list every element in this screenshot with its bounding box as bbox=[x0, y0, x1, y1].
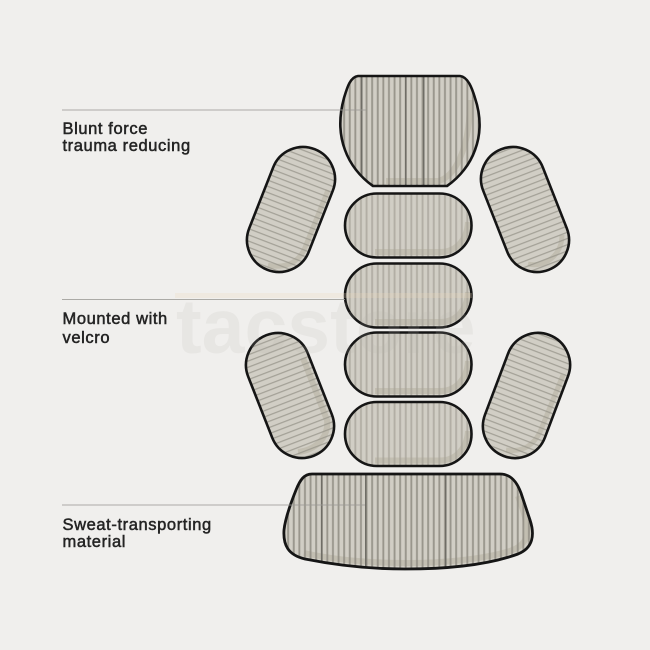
pad: lower right side capsule bbox=[481, 331, 573, 461]
label: sweat-transporting material: Sweat-transporting bbox=[62, 516, 212, 534]
leader line: blunt force bbox=[62, 110, 366, 111]
pad: upper right side capsule bbox=[479, 145, 571, 275]
pad: upper left side capsule bbox=[245, 145, 337, 275]
leader line: sweat-transporting bbox=[62, 504, 365, 506]
pad: center pill 2 bbox=[345, 264, 472, 328]
label: mounted with velcro: velcro bbox=[62, 329, 110, 347]
pad: lower left side capsule bbox=[244, 331, 336, 461]
pad: center pill 4 bbox=[345, 402, 472, 466]
label: blunt force trauma reducing: Blunt force bbox=[62, 120, 148, 138]
pad: bottom neck pad bbox=[284, 474, 534, 570]
label: mounted with velcro: Mounted with bbox=[62, 310, 168, 328]
pad: center pill 3 bbox=[345, 332, 472, 396]
label: blunt force trauma reducing: trauma reducing bbox=[62, 137, 191, 155]
leader line: mounted with velcro bbox=[62, 293, 472, 300]
watermark: tacstore bbox=[176, 284, 476, 370]
pad: top head pad bbox=[339, 76, 480, 187]
label: sweat-transporting material: material bbox=[62, 533, 126, 551]
pad: center pill 1 bbox=[345, 194, 472, 258]
